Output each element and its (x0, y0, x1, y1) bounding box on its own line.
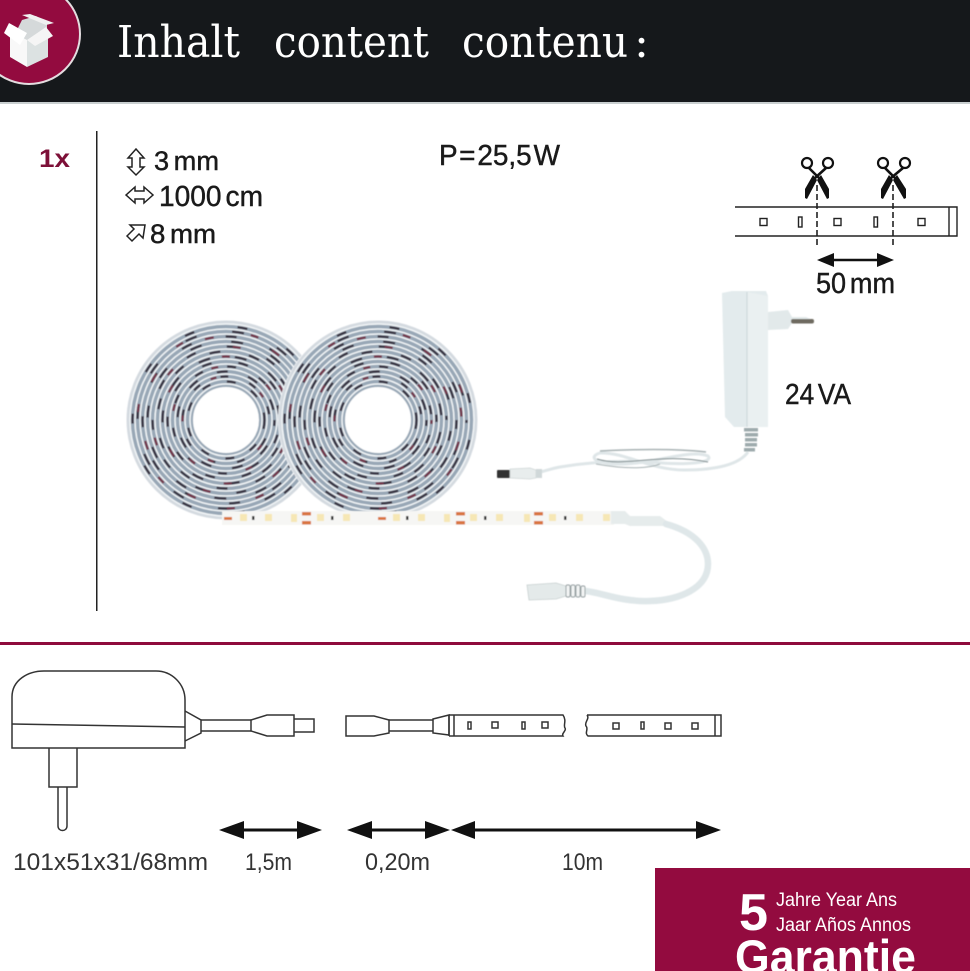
label: 1,5m: 1,5m (245, 849, 292, 876)
depth value: 8 mm (150, 219, 216, 249)
icon: scissors left (802, 158, 833, 199)
strip outline (735, 207, 957, 236)
coil left (126, 320, 326, 520)
warranty years: 5 (739, 884, 768, 942)
adapter line drawing (12, 671, 314, 830)
cable loop (540, 450, 748, 472)
DC plug (497, 470, 511, 478)
power rating: P = 25,5 W (439, 140, 561, 172)
dimensions list (126, 146, 263, 249)
label: 10m: 10m (562, 849, 603, 876)
LED strip coils (126, 320, 478, 520)
label: 0,20m: 0,20m (365, 849, 430, 876)
title: : (634, 17, 649, 68)
header band (0, 0, 970, 104)
unrolled LED strip with cable (222, 511, 708, 601)
height value: 3 mm (154, 146, 219, 176)
arrow: connector length (347, 821, 450, 839)
icon: scissors right (878, 158, 910, 199)
title: content (274, 17, 429, 68)
power adapter photo (497, 291, 814, 479)
vertical divider (96, 131, 98, 611)
arrow: strip length (451, 821, 721, 839)
title (117, 17, 649, 68)
warranty languages line one: Jahre Year Ans (776, 890, 897, 911)
spacing label: 50 mm (816, 268, 895, 300)
icon: diagonal arrow (127, 225, 145, 241)
burgundy divider (0, 642, 970, 645)
icon: open box badge (0, 0, 80, 84)
width value: 1000 cm (159, 181, 263, 213)
connector line drawing (346, 715, 449, 736)
arrow: 50 mm (817, 253, 894, 267)
strip line drawing (449, 715, 721, 736)
cut lines (817, 185, 893, 247)
cutting diagram (735, 158, 957, 300)
adapter dimensions: 101x51x31/68mm (13, 849, 208, 876)
title: contenu (462, 17, 628, 68)
adapter plug (768, 310, 813, 330)
icon: height arrow (128, 149, 144, 175)
title: Inhalt (117, 17, 240, 68)
icon: width arrow (126, 187, 153, 203)
adapter rating: 24 VA (785, 379, 852, 411)
warranty languages line two: Jaar Años Annos (776, 915, 911, 936)
coil right (278, 320, 478, 520)
adapter body (722, 291, 768, 427)
arrow: adapter cable length (219, 821, 322, 839)
strain relief (744, 428, 758, 452)
warranty box (655, 868, 970, 971)
quantity label: 1x (39, 145, 70, 173)
